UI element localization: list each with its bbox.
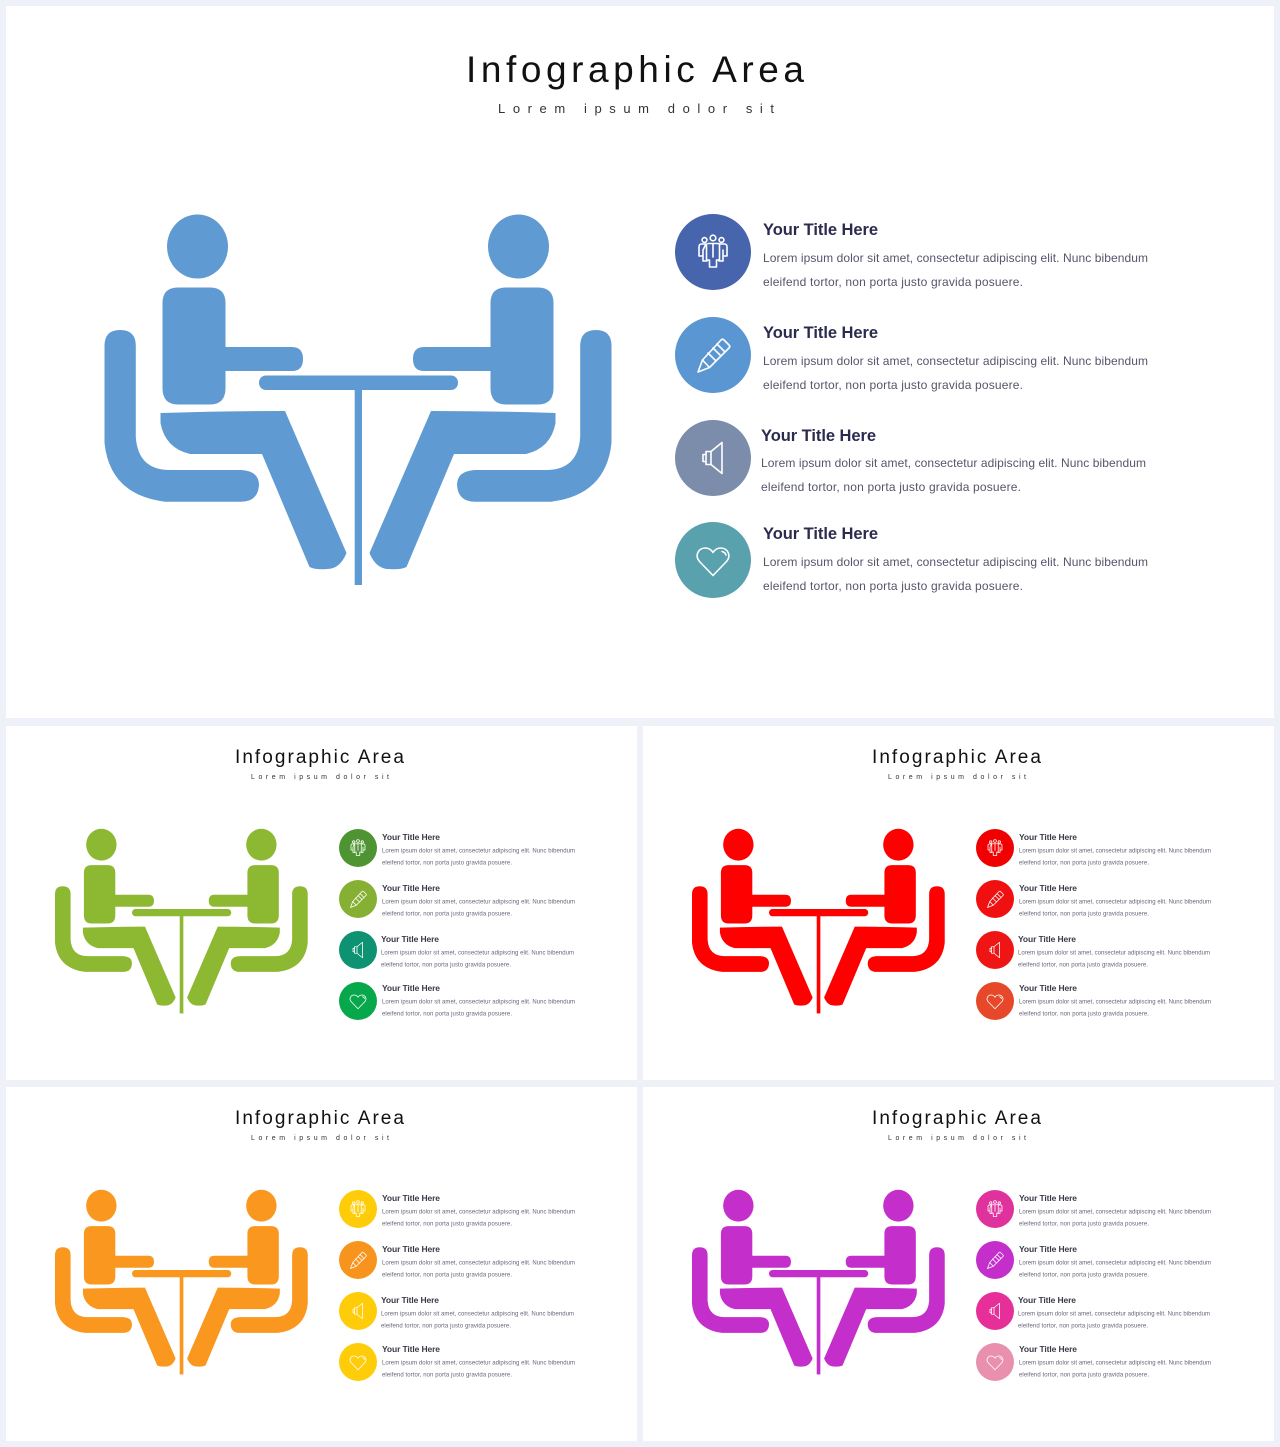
list item 3: [976, 1292, 1210, 1330]
list item 4: Your Title Here: [763, 525, 878, 543]
panel: magenta variant: [643, 1087, 1274, 1441]
list item 4: [339, 1343, 575, 1381]
list item 3: Lorem ipsum dolor sit amet, consectetur adipiscing elit. Nunc bibendum: [761, 456, 1146, 470]
list item 2: Lorem ipsum dolor sit amet, consectetur adipiscing elit. Nunc bibendum: [1019, 900, 1211, 906]
list item 4: eleifend tortor, non porta justo gravida posuere.: [1019, 1012, 1149, 1018]
illustration: red figures: [692, 829, 945, 1013]
list item 3: Lorem ipsum dolor sit amet, consectetur adipiscing elit. Nunc bibendum: [1018, 950, 1210, 956]
list item 1: [339, 829, 575, 867]
list item 2: eleifend tortor, non porta justo gravida posuere.: [1019, 1272, 1149, 1278]
list item 1: eleifend tortor, non porta justo gravida posuere.: [382, 860, 512, 866]
panel: main blue infographic: [6, 6, 1274, 718]
list item 1: Your Title Here: [382, 1193, 440, 1203]
title: Infographic Area: [235, 747, 404, 768]
list item 2: Lorem ipsum dolor sit amet, consectetur adipiscing elit. Nunc bibendum: [763, 354, 1148, 368]
list item 2: [675, 317, 1148, 393]
list item 1: Lorem ipsum dolor sit amet, consectetur adipiscing elit. Nunc bibendum: [382, 848, 575, 854]
subtitle: Lorem ipsum dolor sit: [251, 774, 389, 781]
list item 4: Your Title Here: [1019, 983, 1077, 993]
list item 4: Your Title Here: [382, 1344, 440, 1354]
subtitle: Lorem ipsum dolor sit: [498, 101, 774, 116]
list item 2: Lorem ipsum dolor sit amet, consectetur adipiscing elit. Nunc bibendum: [382, 1260, 575, 1266]
list item 1: eleifend tortor, non porta justo gravida posuere.: [1019, 1222, 1149, 1228]
list item 3: Your Title Here: [1018, 1295, 1076, 1305]
list item 1: eleifend tortor, non porta justo gravida posuere.: [382, 1222, 512, 1228]
list item 4: [675, 522, 1148, 598]
illustration: orange figures: [55, 1190, 308, 1374]
list item 3: [976, 931, 1210, 969]
subtitle: Lorem ipsum dolor sit: [888, 774, 1026, 781]
list item 3: eleifend tortor, non porta justo gravida posuere.: [381, 962, 511, 968]
list item 4: Lorem ipsum dolor sit amet, consectetur adipiscing elit. Nunc bibendum: [382, 1000, 575, 1006]
list item 3: [339, 931, 574, 969]
list item 1: Lorem ipsum dolor sit amet, consectetur adipiscing elit. Nunc bibendum: [1019, 848, 1211, 854]
list item 4: Lorem ipsum dolor sit amet, consectetur adipiscing elit. Nunc bibendum: [763, 555, 1148, 569]
list item 3: Your Title Here: [1018, 934, 1076, 944]
list item 2: eleifend tortor, non porta justo gravida posuere.: [382, 912, 512, 918]
list item 1: Your Title Here: [1019, 832, 1077, 842]
title: Infographic Area: [872, 747, 1041, 768]
list item 1: eleifend tortor, non porta justo gravida posuere.: [763, 275, 1023, 289]
list item 1: [976, 1190, 1211, 1228]
list item 3: eleifend tortor, non porta justo gravida posuere.: [1018, 1324, 1148, 1330]
list item 1: [339, 1190, 575, 1228]
list item 3: Your Title Here: [381, 934, 439, 944]
list item 3: eleifend tortor, non porta justo gravida posuere.: [761, 480, 1021, 494]
list item 4: eleifend tortor, non porta justo gravida posuere.: [382, 1372, 512, 1378]
list item 1: Lorem ipsum dolor sit amet, consectetur adipiscing elit. Nunc bibendum: [1019, 1210, 1211, 1216]
list item 1: Lorem ipsum dolor sit amet, consectetur adipiscing elit. Nunc bibendum: [382, 1210, 575, 1216]
list item 3: Your Title Here: [761, 427, 876, 445]
list item 2: Your Title Here: [1019, 883, 1077, 893]
list item 2: Your Title Here: [763, 324, 878, 342]
title: Infographic Area: [235, 1108, 404, 1129]
illustration: magenta figures: [692, 1190, 945, 1374]
list item 1: Your Title Here: [763, 221, 878, 239]
panel: red variant: [643, 726, 1274, 1080]
list item 3: eleifend tortor, non porta justo gravida posuere.: [1018, 962, 1148, 968]
title: Infographic Area: [466, 49, 804, 90]
list item 4: [339, 982, 575, 1020]
list item 2: [339, 1241, 575, 1279]
subtitle: Lorem ipsum dolor sit: [888, 1135, 1026, 1142]
panel: orange variant: [6, 1087, 637, 1441]
illustration: two people meeting at a table: [104, 214, 612, 585]
list item 1: [675, 214, 1148, 290]
list item 4: eleifend tortor, non porta justo gravida posuere.: [763, 579, 1023, 593]
list item 1: Lorem ipsum dolor sit amet, consectetur adipiscing elit. Nunc bibendum: [763, 251, 1148, 265]
list item 2: eleifend tortor, non porta justo gravida posuere.: [382, 1272, 512, 1278]
list item 2: eleifend tortor, non porta justo gravida posuere.: [1019, 912, 1149, 918]
list item 2: [976, 880, 1211, 918]
list item 3: Lorem ipsum dolor sit amet, consectetur adipiscing elit. Nunc bibendum: [381, 1312, 574, 1318]
list item 2: Your Title Here: [382, 1244, 440, 1254]
list item 2: Your Title Here: [1019, 1244, 1077, 1254]
list item 3: [675, 420, 1146, 496]
list item 2: [339, 880, 575, 918]
list item 3: Lorem ipsum dolor sit amet, consectetur adipiscing elit. Nunc bibendum: [381, 950, 574, 956]
list item 4: Your Title Here: [1019, 1344, 1077, 1354]
illustration: green figures: [55, 829, 308, 1013]
list item 2: [976, 1241, 1211, 1279]
panel: green variant: [6, 726, 637, 1080]
list item 2: eleifend tortor, non porta justo gravida posuere.: [763, 378, 1023, 392]
list item 4: eleifend tortor, non porta justo gravida posuere.: [382, 1012, 512, 1018]
list item 4: [976, 1343, 1211, 1381]
list item 2: Lorem ipsum dolor sit amet, consectetur adipiscing elit. Nunc bibendum: [1019, 1260, 1211, 1266]
list item 2: Your Title Here: [382, 883, 440, 893]
list item 4: Your Title Here: [382, 983, 440, 993]
list item 3: Your Title Here: [381, 1295, 439, 1305]
list item 4: Lorem ipsum dolor sit amet, consectetur adipiscing elit. Nunc bibendum: [1019, 1000, 1211, 1006]
list item 2: Lorem ipsum dolor sit amet, consectetur adipiscing elit. Nunc bibendum: [382, 900, 575, 906]
subtitle: Lorem ipsum dolor sit: [251, 1135, 389, 1142]
list item 1: [976, 829, 1211, 867]
list item 4: [976, 982, 1211, 1020]
list item 1: Your Title Here: [382, 832, 440, 842]
list item 4: eleifend tortor, non porta justo gravida posuere.: [1019, 1372, 1149, 1378]
list item 4: Lorem ipsum dolor sit amet, consectetur adipiscing elit. Nunc bibendum: [382, 1360, 575, 1366]
title: Infographic Area: [872, 1108, 1041, 1129]
list item 3: eleifend tortor, non porta justo gravida posuere.: [381, 1324, 511, 1330]
list item 3: [339, 1292, 574, 1330]
list item 3: Lorem ipsum dolor sit amet, consectetur adipiscing elit. Nunc bibendum: [1018, 1312, 1210, 1318]
list item 1: eleifend tortor, non porta justo gravida posuere.: [1019, 860, 1149, 866]
list item 1: Your Title Here: [1019, 1193, 1077, 1203]
list item 4: Lorem ipsum dolor sit amet, consectetur adipiscing elit. Nunc bibendum: [1019, 1360, 1211, 1366]
